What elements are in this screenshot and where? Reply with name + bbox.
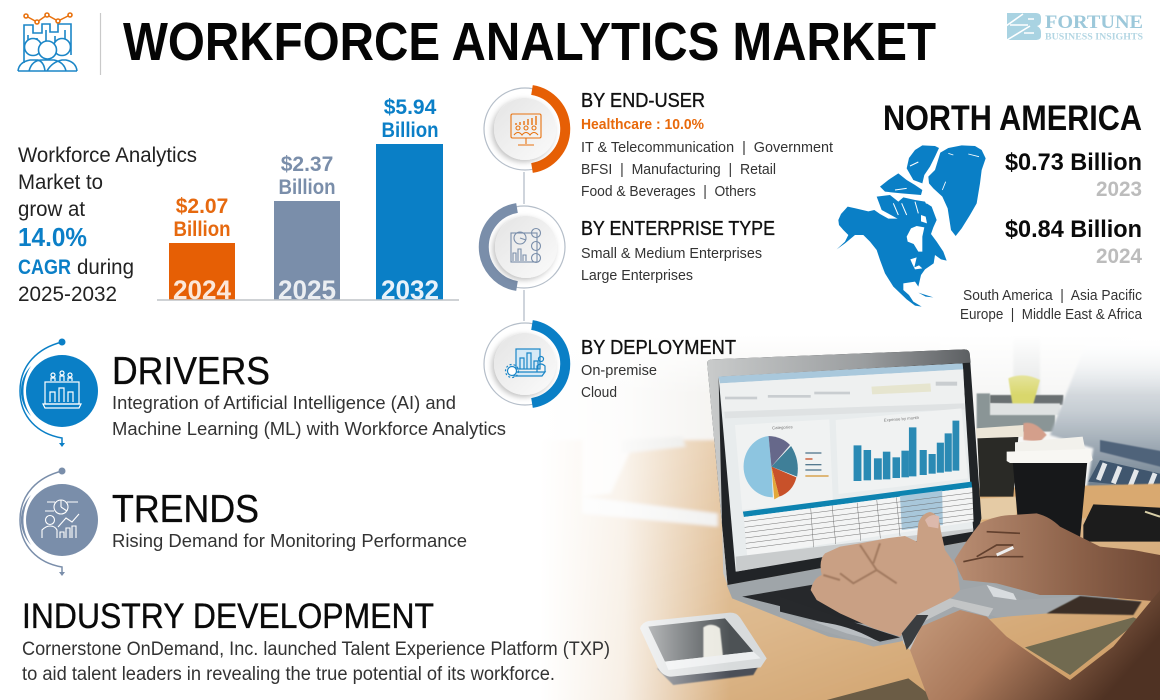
spreadsheet pie chart: Categories [772, 424, 793, 430]
icon: trend line [24, 13, 72, 24]
text: industry development [22, 597, 610, 685]
text: North America market values [1005, 149, 1142, 268]
icon: trends [20, 468, 98, 576]
text: deployment segments: On-premise [581, 362, 657, 379]
text: enterprise segments: BY ENTERPRISE TYPE [581, 218, 775, 240]
bar: 2025 [274, 153, 340, 305]
panel: by deployment [484, 323, 736, 405]
bar: 2024 [169, 195, 235, 305]
bar chart: market size [157, 96, 459, 305]
logo: Fortune Business Insights [1006, 12, 1143, 42]
logo: Fortune Business Insights: BUSINESS INSIGHTS [1045, 32, 1143, 42]
text block: CAGR summary: during [77, 256, 134, 279]
text: end-user segments: BY END-USER [581, 90, 705, 112]
photo: blurred desk background [457, 325, 1160, 700]
text: North America market values: 2024 [1096, 245, 1142, 268]
text: trends: TRENDS [112, 488, 259, 531]
text: deployment segments: Cloud [581, 384, 617, 401]
right hand [954, 513, 1160, 602]
spreadsheet bar chart [836, 408, 968, 494]
forearm [910, 590, 1160, 700]
text: North America market values: $0.84 Billion [1005, 216, 1142, 243]
back coffee cup [976, 425, 1023, 497]
text: drivers: DRIVERS [112, 350, 270, 393]
panel: by enterprise type [483, 206, 775, 288]
phone [640, 613, 767, 685]
spreadsheet table [736, 482, 974, 572]
black wallet [1083, 504, 1160, 542]
text block: CAGR summary: Workforce Analytics [18, 144, 197, 167]
Arctic islands [880, 173, 922, 195]
text: end-user segments [581, 90, 834, 200]
Baffin Island [907, 145, 939, 183]
text block: CAGR summary [18, 144, 197, 306]
text: deployment segments: BY DEPLOYMENT [581, 337, 736, 359]
desk foreground below the laptop [827, 617, 1140, 700]
text: end-user segments: Healthcare : 10.0% [581, 117, 704, 133]
text: end-user segments: BFSI | Manufacturing | Retail [581, 161, 776, 178]
bar: 2032: $5.94 [384, 96, 437, 119]
bracelet [902, 598, 993, 650]
bar: 2025: 2025 [278, 275, 336, 305]
Hudson Bay and lakes [893, 153, 979, 269]
laptop, spreadsheet screen [707, 349, 1125, 645]
spreadsheet bar chart: Expense by month [884, 415, 920, 423]
text: North America market values: 2023 [1096, 178, 1142, 201]
trackpad and front edge of laptop [780, 583, 1142, 647]
text block: CAGR summary: grow at [18, 198, 85, 221]
bar: 2032: 2032 [381, 275, 439, 305]
map: North America [837, 145, 986, 307]
hands and forearm [780, 512, 1160, 700]
text: drivers [112, 350, 506, 439]
laptop lid and screen [707, 349, 981, 585]
text: end-user segments: Food & Beverages | Others [581, 183, 756, 200]
text: other regions: South America | Asia Pacific [963, 288, 1142, 304]
panel: by end-user [484, 88, 834, 200]
bar: 2032 [376, 96, 443, 305]
text: trends: Rising Demand for Monitoring Performance [112, 530, 467, 551]
bar: 2025: Billion [278, 176, 336, 199]
text: end-user segments: IT & Telecommunication | Government [581, 139, 834, 156]
bar: 2032: Billion [382, 119, 438, 142]
mainland [837, 203, 947, 307]
text: enterprise segments: Large Enterprises [581, 267, 693, 284]
text: deployment segments [581, 337, 736, 401]
coffee cup [1007, 437, 1093, 538]
left hand and thumb [811, 512, 960, 637]
segment connector lines [523, 172, 525, 321]
Caribbean islands [918, 293, 933, 297]
text: drivers: Integration of Artificial Intelligence (AI) and [112, 392, 456, 413]
text: industry development: Cornerstone OnDemand, Inc. launched Talent Experience Platform (TXP) [22, 639, 610, 660]
text block: CAGR summary: Market to [18, 171, 103, 194]
laptop base [727, 540, 1125, 645]
text block: CAGR summary: 2025-2032 [18, 283, 117, 306]
text: industry development: INDUSTRY DEVELOPMENT [22, 597, 434, 636]
bar: 2024: $2.07 [176, 195, 228, 218]
text: drivers: Machine Learning (ML) with Workforce Analytics [112, 418, 506, 439]
text: other regions: Europe | Middle East & Africa [960, 307, 1143, 323]
bar: 2024: Billion [174, 218, 230, 241]
logo: Fortune Business Insights: FORTUNE [1045, 12, 1143, 33]
text: enterprise segments: Small & Medium Enterprises [581, 245, 762, 262]
spreadsheet pie chart [735, 419, 833, 510]
icon: deployment ring [484, 323, 566, 405]
title: WORKFORCE ANALYTICS MARKET [123, 12, 936, 72]
text: other regions [960, 288, 1143, 323]
Greenland [928, 145, 986, 236]
text block: CAGR summary: 14.0% [18, 222, 87, 252]
text block: CAGR summary: CAGR [18, 256, 71, 279]
icon: drivers [20, 338, 98, 447]
text: North America market values: $0.73 Billion [1005, 149, 1142, 176]
bar: 2024: 2024 [173, 275, 231, 305]
icon: workforce analytics logo [18, 13, 77, 71]
text: industry development: to aid talent leaders in revealing the true potential of its workforce. [22, 664, 555, 685]
icon: end-user ring [484, 88, 566, 170]
bar: 2025: $2.37 [281, 153, 333, 176]
text: enterprise segments [581, 218, 775, 284]
background right: window and person [940, 325, 1160, 542]
icon: enterprise ring [483, 206, 565, 288]
text: trends [112, 488, 467, 551]
